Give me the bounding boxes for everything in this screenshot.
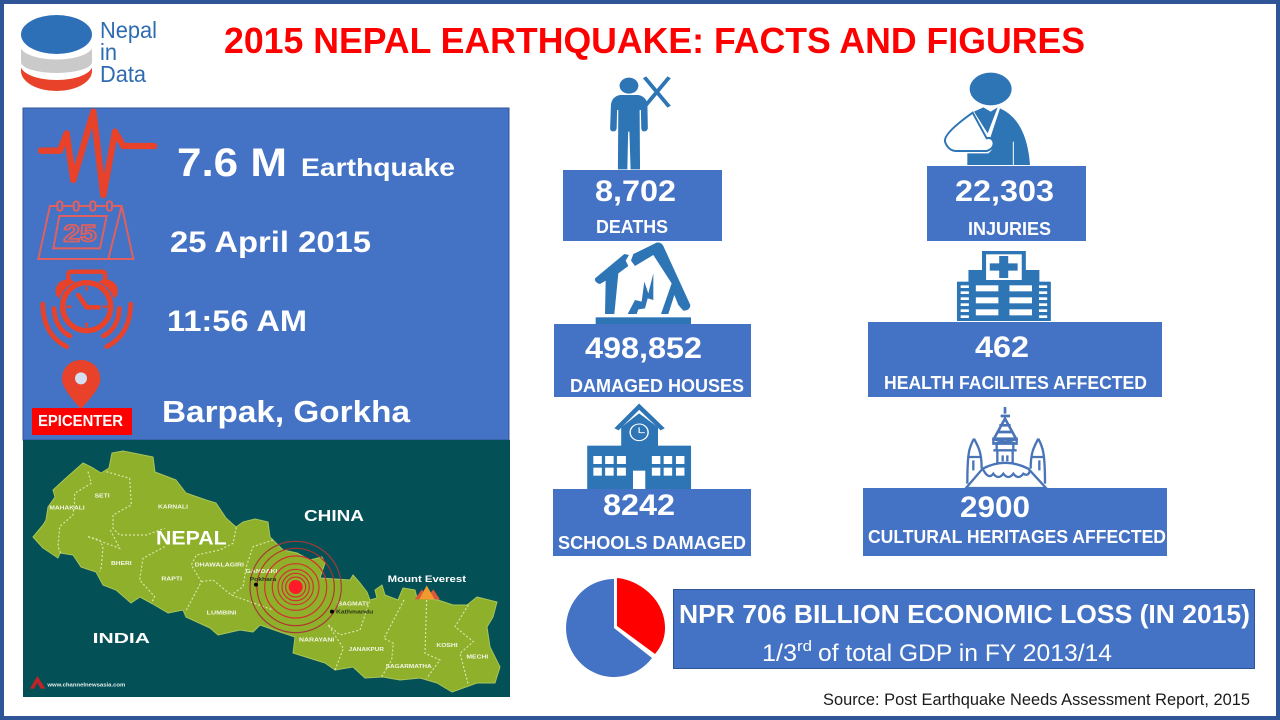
city markers [250, 577, 373, 615]
map labels: DHAWALAGIRI [195, 562, 245, 568]
map labels [49, 494, 489, 670]
city markers: Pokhara [250, 577, 276, 583]
map labels: SETI [95, 494, 110, 500]
map labels: BAGMATI [337, 602, 368, 608]
map credit: www.channelnewsasia.com [46, 682, 125, 688]
icon: school building [587, 407, 691, 489]
epicenter location text: Barpak, Gorkha [162, 394, 411, 429]
magnitude text: Earthquake [301, 154, 455, 182]
map labels: KOSHI [436, 643, 458, 649]
icon: seismic wave [41, 112, 154, 195]
GDP share text: 1/3 [762, 640, 797, 667]
country labels [93, 508, 466, 647]
stat: cultural heritages: CULTURAL HERITAGES AFFECTED [868, 526, 1166, 547]
time text: 11:56 AM [167, 305, 307, 338]
panel: economic loss [674, 590, 1254, 668]
earthquake rings [250, 541, 341, 633]
map labels: NARAYANI [299, 638, 335, 644]
title: 2015 NEPAL EARTHQUAKE: FACTS AND FIGURES [224, 20, 1085, 61]
map labels: GANDAKI [246, 569, 278, 575]
logo: Nepal in Data [20, 15, 157, 91]
stat: schools [553, 407, 751, 556]
map labels: JANAKPUR [349, 647, 384, 653]
stat: health facilities: HEALTH FACILITES AFFECTED [884, 372, 1147, 393]
map labels: SAGARMATHA [386, 664, 432, 670]
epicenter label: EPICENTER [38, 413, 123, 430]
stat: health facilities: 462 [975, 331, 1029, 364]
icon: person with X [610, 77, 669, 169]
date text: 25 April 2015 [170, 226, 371, 259]
map credit [30, 676, 125, 689]
country labels: CHINA [304, 508, 364, 525]
panel: economic loss: NPR 706 BILLION ECONOMIC LOSS (IN 2015) [679, 599, 1250, 629]
stat: schools: 8242 [603, 489, 675, 522]
icon: location pin [62, 360, 100, 409]
icon: cracked house [595, 242, 691, 324]
icon: hospital [957, 251, 1051, 321]
stat: damaged houses [554, 242, 751, 397]
icon: calendar [38, 201, 133, 259]
icon: alarm clock [43, 272, 131, 347]
stat: cultural heritages [863, 407, 1167, 556]
icon: stacked discs [20, 15, 92, 91]
country labels: NEPAL [156, 529, 227, 550]
map labels: BHERI [111, 561, 132, 567]
country labels: INDIA [93, 631, 151, 647]
stat: injuries [927, 73, 1086, 241]
icon: person with arm sling [945, 73, 1030, 165]
epicenter label [32, 408, 132, 435]
map labels: MAHAKALI [49, 505, 85, 511]
logo wordmark [100, 17, 157, 87]
logo wordmark: in [100, 39, 117, 65]
stat: deaths: 8,702 [595, 175, 676, 208]
Nepal country shape [33, 451, 500, 692]
stat: cultural heritages: 2900 [960, 491, 1030, 524]
GDP share text: rd [797, 638, 812, 655]
source note: Source: Post Earthquake Needs Assessment Report, 2015 [823, 690, 1250, 709]
stat: injuries: 22,303 [955, 175, 1054, 208]
map labels: LUMBINI [207, 611, 237, 617]
stat: schools: SCHOOLS DAMAGED [558, 532, 746, 553]
stat: deaths [563, 77, 722, 241]
map labels: RAPTI [161, 576, 183, 582]
map labels: MECHI [466, 655, 489, 661]
icon: Mount Everest peaks [415, 585, 440, 599]
logo wordmark: Nepal [100, 17, 157, 43]
panel: earthquake key facts [23, 108, 509, 440]
stat: injuries: INJURIES [968, 218, 1051, 239]
pie chart: economic loss share [566, 578, 665, 677]
magnitude text: 7.6 M [177, 141, 287, 185]
map labels: KARNALI [158, 505, 189, 511]
stat: deaths: DEATHS [596, 216, 668, 237]
logo wordmark: Data [100, 61, 146, 87]
map of Nepal with epicenter [23, 440, 510, 697]
city markers: Kathmandu [336, 609, 373, 615]
stat: damaged houses: DAMAGED HOUSES [570, 375, 744, 396]
stat: health facilities [868, 251, 1162, 397]
stat: damaged houses: 498,852 [585, 332, 702, 365]
icon: temple stupa [966, 407, 1046, 488]
GDP share text: of total GDP in FY 2013/14 [818, 640, 1112, 667]
magnitude text [177, 141, 455, 185]
country labels: Mount Everest [388, 574, 466, 584]
icon: calendar: 25 [63, 221, 97, 248]
